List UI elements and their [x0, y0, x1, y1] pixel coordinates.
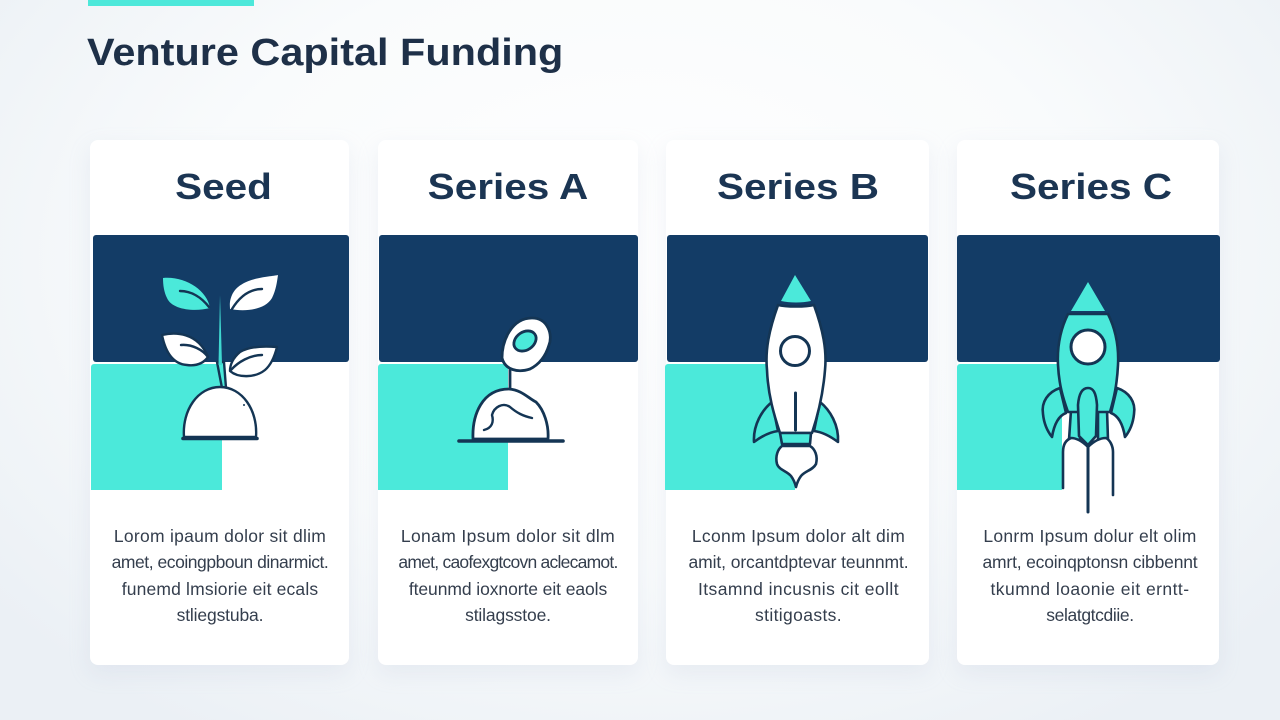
- navy block: [379, 235, 638, 362]
- description: Series A: stilagsstoe.: [465, 605, 551, 625]
- icon: rocket launching: [1041, 282, 1136, 514]
- description: Series B: [689, 526, 908, 625]
- description: Series C: [982, 526, 1198, 625]
- description: Series B: Lconm Ipsum dolor alt dim: [692, 526, 905, 546]
- teal block: [957, 364, 1062, 490]
- heading: Series C: Series C: [1010, 166, 1172, 207]
- description: Series A: amet, caofexgtcovn aclecamot.: [398, 552, 618, 572]
- icon: rocket: [752, 275, 840, 488]
- accent bar: [88, 0, 254, 6]
- description: Series A: fteunmd ioxnorte eit eaols: [409, 579, 607, 599]
- teal block: [665, 364, 795, 490]
- description: Series A: [398, 526, 618, 625]
- icon: sprout: [161, 275, 278, 440]
- teal block: [91, 364, 222, 490]
- icon: sprouting seed: [457, 316, 565, 443]
- teal block: [378, 364, 508, 490]
- title: Venture Capital Funding: [87, 32, 563, 74]
- description: Series C: amrt, ecoinqptonsn cibbennt: [982, 552, 1198, 572]
- panel: Seed: [90, 140, 349, 665]
- panel: Series B: [666, 140, 929, 665]
- heading: Series B: Series B: [717, 166, 879, 207]
- panel: Series A: [378, 140, 638, 665]
- description: Series C: selatgtcdiie.: [1046, 605, 1134, 625]
- description: Seed: stliegstuba.: [177, 605, 263, 625]
- description: Seed: Lorom ipaum dolor sit dlim: [114, 526, 326, 546]
- navy block: [667, 235, 928, 362]
- description: Series B: stitigoasts.: [755, 605, 842, 625]
- description: Seed: funemd lmsiorie eit ecals: [122, 579, 318, 599]
- description: Series A: Lonam Ipsum dolor sit dlm: [401, 526, 615, 546]
- description: Series C: tkumnd loaonie eit erntt-: [990, 579, 1190, 599]
- heading: Series A: Series A: [428, 166, 588, 207]
- description: Seed: amet, ecoingpboun dinarmict.: [112, 552, 328, 572]
- panel: Series C: [957, 140, 1219, 665]
- heading: Seed: Seed: [175, 166, 272, 207]
- navy block: [957, 235, 1220, 362]
- description: Series B: amit, orcantdptevar teunnmt.: [689, 552, 908, 572]
- description: Series B: Itsamnd incusnis cit eollt: [698, 579, 899, 599]
- description: Seed: [112, 526, 328, 625]
- description: Series C: Lonrm Ipsum dolur elt olim: [983, 526, 1197, 546]
- navy block: [93, 235, 349, 362]
